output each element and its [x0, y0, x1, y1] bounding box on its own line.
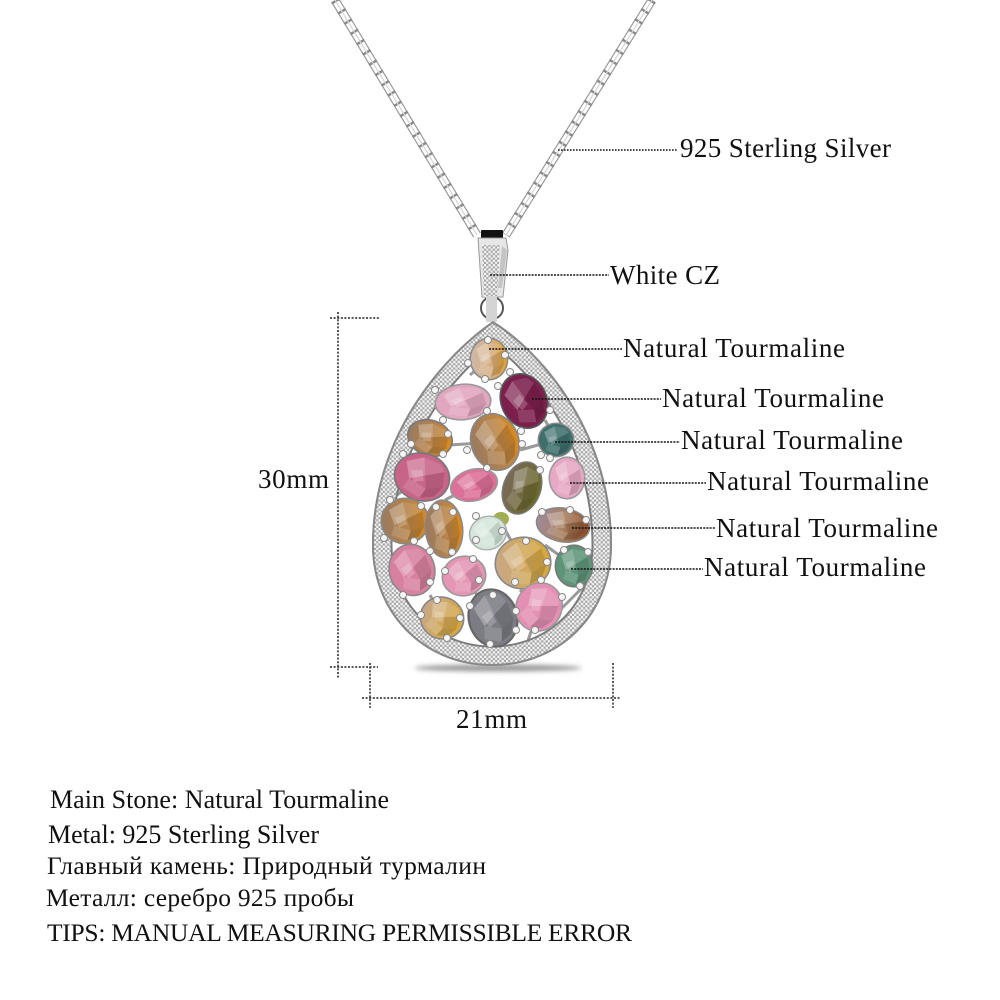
stone: light pink right — [548, 456, 586, 500]
callout: tourmaline 4: Natural Tourmaline — [707, 466, 929, 496]
stone: pink top — [433, 381, 493, 423]
stone: pink bottom right — [506, 573, 572, 641]
gemstones — [380, 337, 593, 653]
specifications text: TIPS: MANUAL MEASURING PERMISSIBLE ERROR — [47, 918, 632, 947]
stone: smoky brown — [533, 503, 593, 547]
specifications text: Металл: серебро 925 пробы — [46, 883, 354, 912]
stone: amber brown left — [380, 497, 430, 545]
callout: tourmaline 6: Natural Tourmaline — [704, 552, 926, 582]
stone: pink middle — [446, 463, 502, 507]
specifications text: Metal: 925 Sterling Silver — [48, 820, 319, 849]
pave frame — [372, 321, 612, 666]
stone: amber bottom — [412, 589, 472, 647]
stone: grey bottom — [461, 583, 525, 653]
stone: yellow — [490, 532, 556, 594]
specifications text: Main Stone: Natural Tourmaline — [50, 785, 389, 814]
shadow — [414, 664, 582, 672]
stone: pink lower middle — [437, 550, 491, 602]
callout: tourmaline 5: Natural Tourmaline — [716, 513, 938, 543]
callout: tourmaline 2: Natural Tourmaline — [662, 383, 884, 413]
dimension: width 21mm — [362, 663, 620, 734]
stone: garnet — [490, 365, 558, 437]
necklace chain — [335, 0, 652, 235]
stone: orange brown centre — [462, 406, 528, 478]
pendant bail — [478, 230, 508, 322]
dimension: width 21mm: 21mm — [456, 704, 527, 734]
callout: white CZ: White CZ — [610, 260, 720, 290]
callout: tourmaline 3: Natural Tourmaline — [681, 425, 903, 455]
metal struts — [398, 370, 591, 640]
specifications text: Главный камень: Природный турмалин — [47, 851, 486, 880]
stone: green — [555, 544, 593, 588]
prongs — [380, 336, 592, 648]
stone: citrine top — [470, 337, 508, 381]
specifications text — [46, 785, 632, 947]
stone: pink lower left — [382, 538, 442, 602]
stone: olive — [494, 455, 550, 521]
stone: amber tall — [422, 498, 466, 560]
pendant body — [372, 321, 612, 672]
stone: mint — [464, 510, 512, 556]
stone: small green — [493, 512, 509, 526]
callout: chain: 925 Sterling Silver — [680, 133, 891, 163]
stone: brown left — [402, 413, 458, 463]
dimension: height 30mm — [258, 312, 380, 678]
stone: deep pink left — [388, 446, 456, 508]
dimension: height 30mm: 30mm — [258, 464, 329, 494]
stone: teal — [537, 423, 575, 457]
callout: tourmaline 1: Natural Tourmaline — [623, 333, 845, 363]
